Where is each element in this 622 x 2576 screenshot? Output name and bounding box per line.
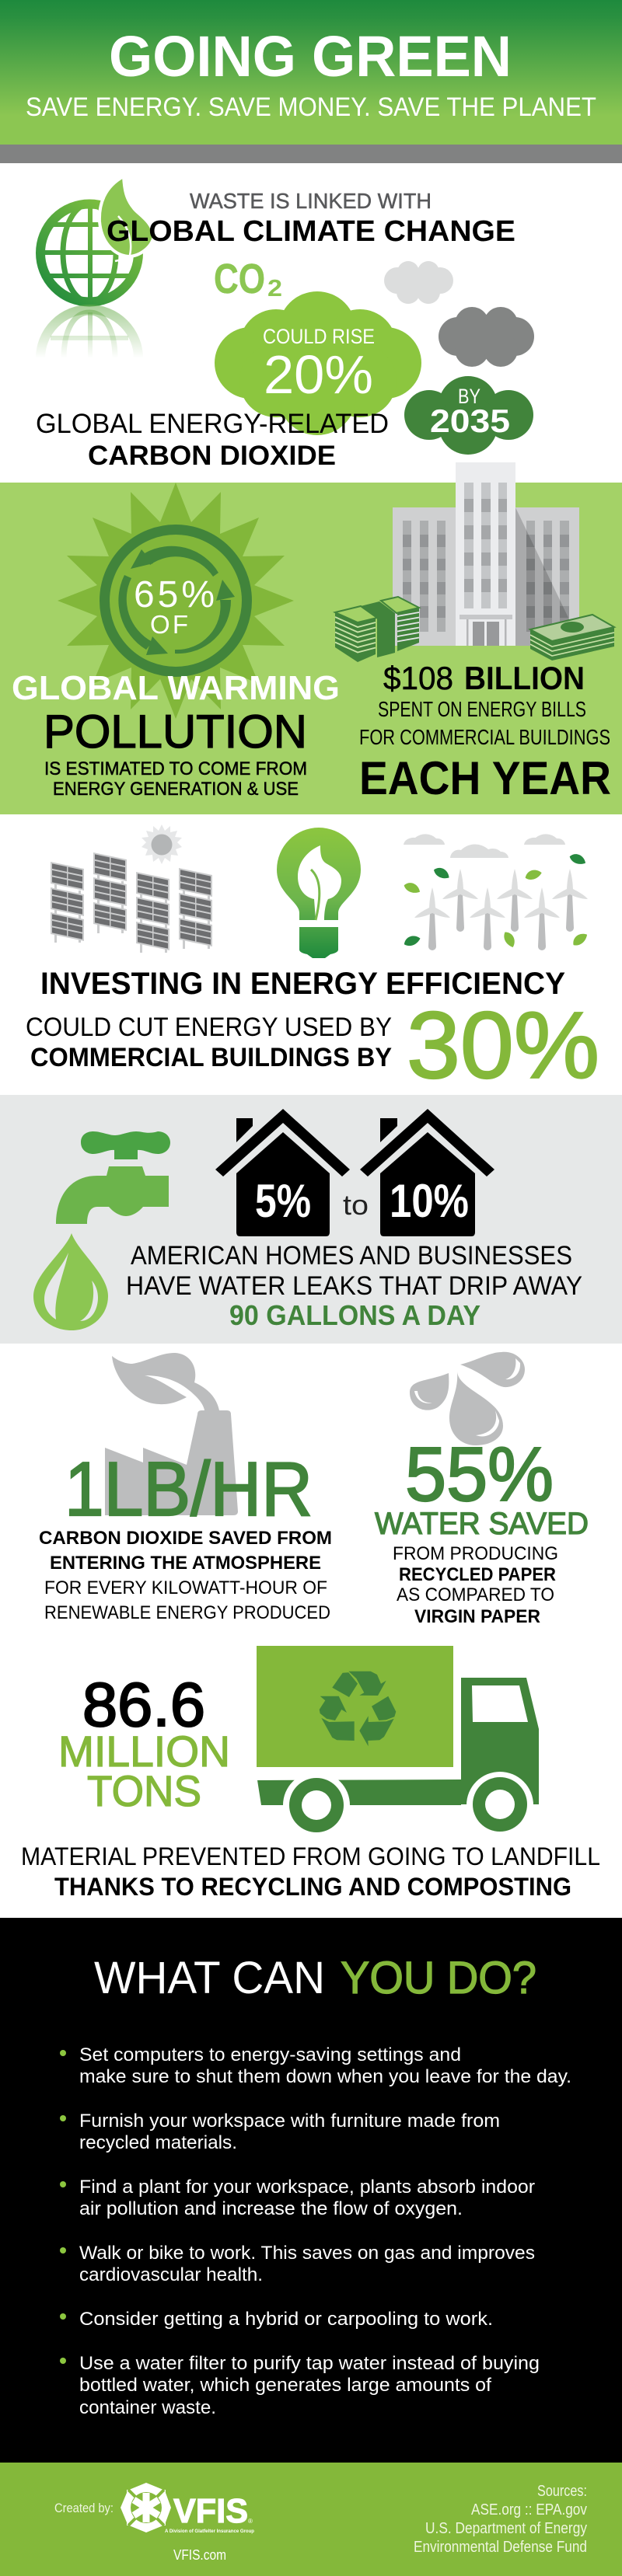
icon: light grey cloud bbox=[384, 261, 453, 304]
panel: energy efficiency bbox=[26, 824, 599, 1098]
stat: 2035: 2035 bbox=[430, 403, 510, 439]
tip: water filter: bottled water, which generates large amounts of bbox=[79, 2375, 491, 2396]
heading: WASTE IS LINKED WITH bbox=[190, 189, 432, 213]
heading bold: GLOBAL CLIMATE CHANGE bbox=[107, 215, 515, 248]
text: thanks to recycling: THANKS TO RECYCLING AND COMPOSTING bbox=[54, 1873, 571, 1901]
icon: factory with leaf bbox=[105, 1353, 238, 1515]
tip: plant: air pollution and increase the flow of oxygen. bbox=[79, 2198, 463, 2219]
icon: money stack left bbox=[335, 597, 419, 662]
icon: water drops bbox=[410, 1352, 525, 1445]
text: every kilowatt-hour: FOR EVERY KILOWATT-HOUR OF bbox=[44, 1577, 327, 1598]
panel: landfill bbox=[21, 1646, 600, 1901]
panel: footer bbox=[0, 2463, 622, 2576]
icon: water drop bbox=[33, 1233, 108, 1330]
tip: furniture: Furnish your workspace with furniture made from bbox=[79, 2111, 500, 2132]
tip: walk or bike bbox=[60, 2243, 535, 2285]
heading: water saved: WATER SAVED bbox=[375, 1507, 589, 1541]
icon: light bulb with leaf bbox=[277, 828, 361, 958]
stat: 55%: 55% bbox=[405, 1431, 554, 1517]
icon: sunburst with recycling ring bbox=[58, 483, 294, 719]
text: recycled paper: RECYCLED PAPER bbox=[399, 1564, 556, 1585]
text: water leaks: HAVE WATER LEAKS THAT DRIP AWAY bbox=[126, 1271, 582, 1301]
icon: dark grey cloud bbox=[439, 307, 534, 367]
logo registered mark: ® bbox=[248, 2518, 253, 2525]
text: carbon dioxide saved: CARBON DIOXIDE SAVED FROM bbox=[39, 1528, 332, 1549]
logo tagline: A Division of Glatfelter Insurance Group bbox=[165, 2529, 254, 2534]
text: created by: Created by: bbox=[54, 2501, 114, 2515]
icon: globe reflection bbox=[40, 309, 138, 358]
tip: hybrid: Consider getting a hybrid or carpooling to work. bbox=[79, 2309, 493, 2330]
tip: furniture: recycled materials. bbox=[79, 2132, 237, 2153]
stat: 5%: 5% bbox=[255, 1175, 311, 1227]
text: sources: Environmental Defense Fund bbox=[414, 2539, 587, 2556]
panel: global climate change bbox=[36, 176, 534, 471]
tip: computers: make sure to shut them down when you leave for the day. bbox=[79, 2066, 571, 2087]
text: energy generation: ENERGY GENERATION & USE bbox=[53, 779, 299, 800]
tip: furniture bbox=[60, 2111, 500, 2153]
tip: walk or bike: cardiovascular health. bbox=[79, 2264, 263, 2285]
title: GOING GREEN bbox=[109, 24, 512, 89]
icon: green cloud bbox=[215, 291, 421, 435]
tip: computers: Set computers to energy-saving settings and bbox=[79, 2044, 461, 2065]
header banner bbox=[0, 0, 622, 145]
text: estimated: IS ESTIMATED TO COME FROM bbox=[44, 758, 307, 779]
heading: what can: WHAT CAN bbox=[94, 1953, 325, 2003]
text: of: OF bbox=[150, 610, 188, 639]
icon: VFIS star logo bbox=[121, 2483, 171, 2532]
tip: plant: Find a plant for your workspace, plants absorb indoor bbox=[79, 2177, 535, 2198]
tip: water filter: Use a water filter to purify tap water instead of buying bbox=[79, 2353, 540, 2374]
stat: 86.6: 86.6 bbox=[82, 1670, 205, 1739]
icon: house 5% bbox=[215, 1109, 350, 1236]
stat: 20%: 20% bbox=[264, 344, 373, 405]
icon: globe with leaf bbox=[40, 176, 154, 358]
text: to: to bbox=[343, 1189, 369, 1221]
panel: what can you do bbox=[0, 1918, 622, 2463]
CO2 subscript: 2 bbox=[267, 274, 282, 302]
text: sources: U.S. Department of Energy bbox=[425, 2520, 587, 2537]
icon: money stack right bbox=[530, 615, 614, 661]
text: by: BY bbox=[458, 385, 480, 408]
stat: 1LB/HR: 1LB/HR bbox=[65, 1446, 313, 1532]
panel: global warming and bills bbox=[0, 462, 622, 814]
text: carbon dioxide: CARBON DIOXIDE bbox=[88, 441, 336, 471]
logo text: VFIS bbox=[173, 2492, 248, 2530]
heading: you do: YOU DO? bbox=[341, 1953, 536, 2003]
heading: global warming: GLOBAL WARMING bbox=[12, 669, 340, 707]
text: commercial buildings: COMMERCIAL BUILDINGS BY bbox=[30, 1043, 392, 1072]
tip: water filter bbox=[60, 2353, 540, 2418]
text: sources: ASE.org :: EPA.gov bbox=[471, 2501, 587, 2518]
icon: faucet bbox=[56, 1131, 170, 1224]
icon: house 10% bbox=[360, 1109, 494, 1236]
heading: investing: INVESTING IN ENERGY EFFICIENCY bbox=[40, 967, 565, 1001]
text: renewable energy: RENEWABLE ENERGY PRODUCED bbox=[44, 1602, 330, 1623]
panel: carbon and water savings bbox=[39, 1352, 589, 1627]
stat: tons: TONS bbox=[87, 1766, 201, 1815]
stat: billion: BILLION bbox=[464, 660, 585, 696]
grey divider band bbox=[0, 145, 622, 163]
text: as compared to: AS COMPARED TO bbox=[397, 1584, 554, 1605]
heading: pollution: POLLUTION bbox=[44, 706, 307, 758]
text: could cut: COULD CUT ENERGY USED BY bbox=[26, 1013, 392, 1042]
text: global energy-related: GLOBAL ENERGY-RELATED bbox=[36, 409, 389, 439]
text: sources: Sources: bbox=[537, 2483, 587, 2500]
text: website: VFIS.com bbox=[173, 2547, 226, 2563]
tip: computers bbox=[60, 2044, 571, 2087]
icon: dark green cloud bbox=[404, 376, 533, 455]
text: american homes: AMERICAN HOMES AND BUSINESSES bbox=[131, 1241, 572, 1271]
panel: water leaks bbox=[0, 1095, 622, 1344]
stat: million: MILLION bbox=[58, 1727, 230, 1776]
icon: office building bbox=[393, 462, 579, 646]
stat: $108: $108 bbox=[383, 660, 453, 696]
stat: 65%: 65% bbox=[134, 574, 215, 615]
tip: walk or bike: Walk or bike to work. This saves on gas and improves bbox=[79, 2243, 535, 2264]
icon: solar panels bbox=[51, 852, 212, 953]
text: from producing: FROM PRODUCING bbox=[393, 1543, 558, 1564]
text: sources bbox=[414, 2483, 587, 2556]
stat: 30%: 30% bbox=[407, 992, 599, 1098]
icon: wind turbines with clouds and leaves bbox=[402, 834, 589, 950]
text: entering atmosphere: ENTERING THE ATMOSPHERE bbox=[50, 1553, 321, 1574]
stat: 10%: 10% bbox=[390, 1175, 469, 1227]
icon: recycling symbol bbox=[320, 1671, 396, 1746]
icon: recycling truck bbox=[257, 1646, 539, 1832]
icon: sun bbox=[142, 824, 182, 864]
text: virgin paper: VIRGIN PAPER bbox=[414, 1606, 540, 1627]
tip: plant bbox=[60, 2177, 535, 2219]
stat: 90 gallons: 90 GALLONS A DAY bbox=[229, 1299, 480, 1331]
tip: water filter: container waste. bbox=[79, 2397, 216, 2418]
text: could rise: COULD RISE bbox=[263, 325, 375, 348]
text: material prevented: MATERIAL PREVENTED FROM GOING TO LANDFILL bbox=[21, 1842, 600, 1870]
CO2 label: CO bbox=[214, 256, 265, 302]
